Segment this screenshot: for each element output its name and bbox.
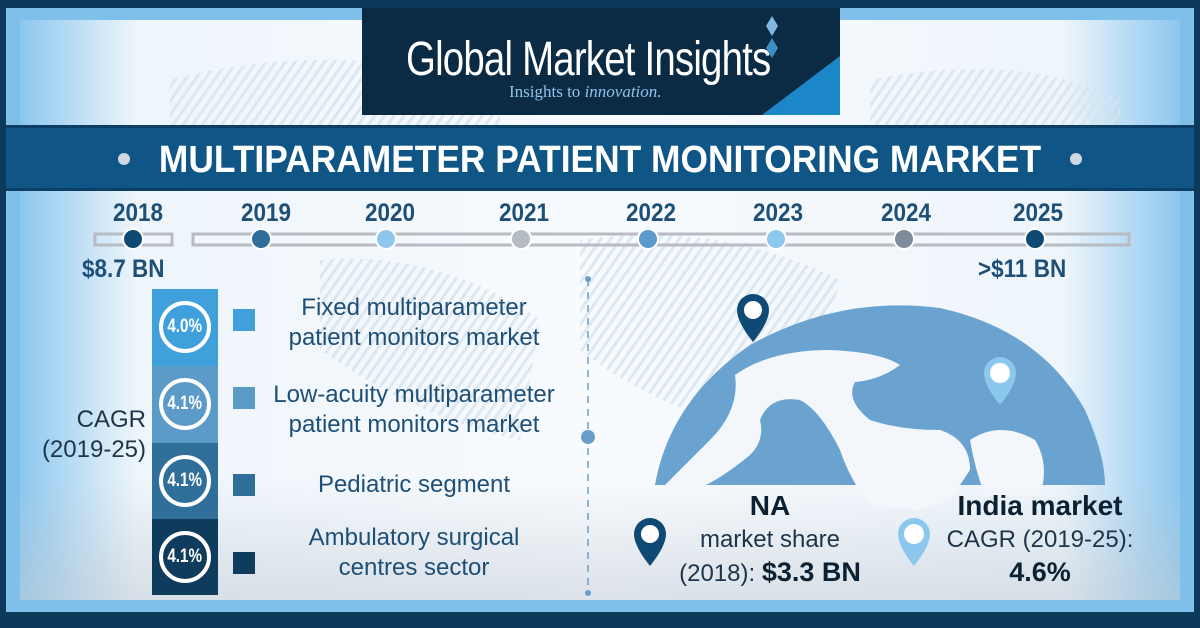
timeline (82, 199, 1130, 283)
title band (6, 125, 1194, 191)
timeline: 2023 (753, 199, 803, 227)
NA stat: NA (750, 490, 790, 521)
icon: India pin (984, 357, 1016, 405)
logo (362, 8, 840, 115)
timeline: 2025 (1013, 199, 1063, 227)
timeline: 2021 (499, 199, 549, 227)
CAGR label (42, 406, 146, 463)
India stat: India market (958, 490, 1122, 521)
India stat (947, 490, 1133, 587)
legend items: Pediatric segment (318, 471, 510, 498)
NA stat (679, 490, 861, 587)
logo: Insights to innovation. (509, 82, 662, 101)
segment bars (152, 289, 218, 595)
icon: India pin small (898, 518, 930, 566)
segment bars: 4.1% (168, 393, 202, 414)
globe (655, 305, 1105, 510)
segment bars: 4.0% (168, 316, 202, 337)
segment bars: 4.1% (168, 546, 202, 567)
timeline: 2020 (365, 199, 415, 227)
divider (581, 276, 595, 596)
logo: Global Market Insights (406, 33, 770, 86)
legend items: Ambulatory surgical (309, 524, 519, 551)
title band: MULTIPARAMETER PATIENT MONITORING MARKET (159, 139, 1041, 181)
legend items: patient monitors market (289, 324, 539, 351)
icon: NA pin (737, 294, 769, 342)
NA stat: market share (700, 526, 840, 553)
timeline: 2022 (626, 199, 676, 227)
India stat: CAGR (2019-25): (947, 526, 1133, 553)
legend items: centres sector (339, 554, 489, 581)
timeline: $8.7 BN (82, 255, 165, 283)
legend items: patient monitors market (289, 411, 539, 438)
India stat: 4.6% (1009, 557, 1071, 587)
NA stat: (2018): $3.3 BN (679, 557, 861, 587)
timeline: >$11 BN (978, 255, 1066, 283)
segment bars: 4.1% (168, 470, 202, 491)
timeline: 2018 (113, 199, 163, 227)
legend items: Fixed multiparameter (301, 294, 527, 321)
legend items (233, 294, 555, 581)
timeline: 2019 (241, 199, 291, 227)
CAGR label: (2019-25) (42, 436, 146, 463)
timeline: 2024 (881, 199, 931, 227)
legend items: Low-acuity multiparameter (273, 381, 555, 408)
icon: NA pin small (634, 518, 666, 566)
CAGR label: CAGR (77, 406, 146, 433)
